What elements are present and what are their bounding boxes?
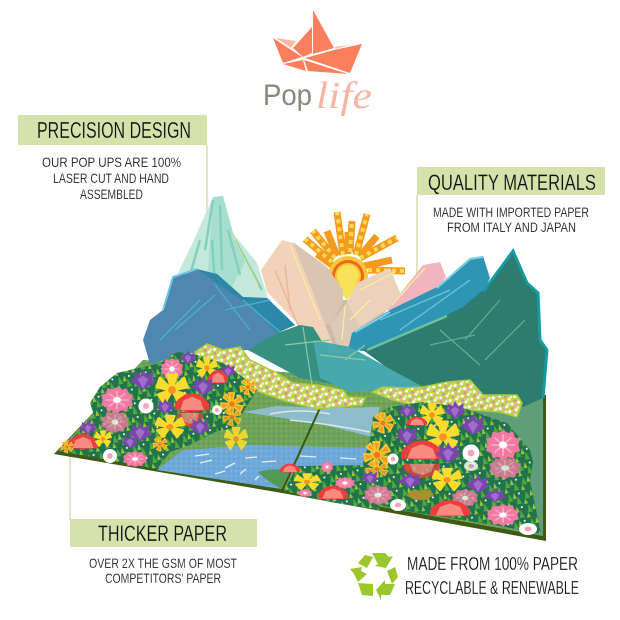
text: thicker body: OVER 2X THE GSM OF MOST <box>89 555 237 571</box>
text: precision body: OUR POP UPS ARE 100% <box>42 154 181 170</box>
hedge: left <box>195 344 365 409</box>
text: quality body <box>433 204 589 235</box>
callout: thicker paper <box>70 456 257 586</box>
heading band: thicker paper <box>70 519 257 547</box>
flower bed: left <box>60 350 257 469</box>
text: made from 100% paper <box>405 554 579 598</box>
pop-up card illustration <box>54 196 547 541</box>
board centre fold <box>282 408 320 491</box>
callout: quality materials <box>417 167 605 275</box>
text: thicker body <box>89 555 237 586</box>
mountain: blue right <box>348 256 490 352</box>
mountain: mint <box>178 196 268 310</box>
heading: thicker paper: THICKER PAPER <box>98 521 227 546</box>
mountain: peach centre <box>261 240 401 350</box>
hedge: right <box>372 380 522 417</box>
text: precision body: ASSEMBLED <box>80 186 143 202</box>
logo: Poplife paper boat <box>263 10 372 117</box>
logo word: Pop: Pop <box>263 79 312 112</box>
icon: sun <box>305 212 405 300</box>
card base board <box>54 360 546 541</box>
heading band: quality materials <box>417 167 605 195</box>
flower bed: right <box>361 401 541 535</box>
flower strip: front centre <box>280 461 380 510</box>
text: quality body: FROM ITALY AND JAPAN <box>447 219 576 235</box>
mountain: teal centre <box>248 325 423 392</box>
mountain: pink <box>387 262 446 312</box>
text: precision body <box>42 154 181 202</box>
icon: origami boat <box>273 10 362 74</box>
mountain: blue left <box>143 269 295 364</box>
text: thicker body: COMPETITORS' PAPER <box>105 570 221 586</box>
heading: precision design: PRECISION DESIGN <box>37 117 191 143</box>
callout: precision design <box>18 115 207 215</box>
lake <box>157 445 373 489</box>
icon: recycling arrows <box>350 553 398 600</box>
heading band: precision design <box>18 115 207 145</box>
grass patch at lake shore <box>258 469 290 489</box>
stream <box>243 406 380 437</box>
text: precision body: LASER CUT AND HAND <box>53 170 169 186</box>
mountain: green right <box>363 250 547 407</box>
logo word: life: life <box>316 75 372 117</box>
